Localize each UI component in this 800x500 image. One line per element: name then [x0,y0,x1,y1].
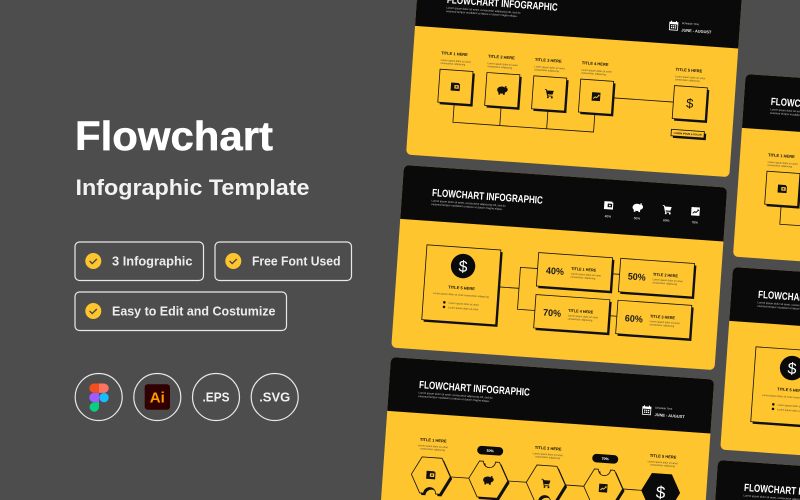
card 60%: Lorem ipsum dolor sit amet [650,320,680,325]
step 5: Lorem ipsum dolor sit amet [675,75,706,80]
main title: Flowchart [75,113,273,159]
main card: Lorem ipsum dolor sit amet [448,302,479,307]
slide 4 step 1: consectetur adipiscing [767,164,793,168]
slide 5 main card [751,347,800,429]
card 70%: Lorem ipsum dolor sit amet [568,314,598,319]
slide 1 description: Lorem ipsum dolor sit amet, consectetur adipiscing elit, sed do [446,6,521,15]
slide 2 header stats: 50% [634,216,640,221]
step 1 [438,50,476,107]
main card [422,245,503,327]
main card: TITLE 5 HERE [448,284,475,291]
hexagon step 3: consectetur adipiscing [535,455,561,460]
slide 2 header stats: 60% [663,218,670,223]
card 40%: TITLE 1 HERE [571,266,597,273]
step 4 [578,60,617,116]
slide 3 description: Lorem ipsum dolor sit amet, consectetur adipiscing elit, sed do [418,391,493,400]
card 60%: TITLE 3 HERE [650,314,675,320]
card 50%: Lorem ipsum dolor sit amet [653,278,683,283]
slide 2 description: Lorem ipsum dolor sit amet, consectetur adipiscing elit, sed do [431,199,506,208]
step 1: TITLE 1 HERE [441,50,468,57]
panel: slide 6 cropped hexagon flowchart [705,460,800,500]
hexagon step 1 [410,436,455,497]
icon: Adobe Illustrator: Ai [150,390,165,406]
card 70%: TITLE 4 HERE [568,308,594,315]
card 50%: consectetur adipiscing [652,281,678,286]
slide 2 heading: FLOWCHART INFOGRAPHIC [432,187,544,207]
slide 1 button: LOREM IPSUM & DOLOR [674,132,702,137]
slide 5 main card: $ [787,361,797,378]
slide 3 date: JUNE - AUGUST [654,412,685,419]
slide 2 description: eiusmod tempor incididunt ut labore et dolore magna aliqua. [431,202,503,211]
step 3: Lorem ipsum dolor sit amet [534,65,565,70]
hexagon step 3: TITLE 3 HERE [535,445,562,452]
icon: Figma [75,374,122,420]
hexagon step 3: Lorem ipsum dolor sit amet [533,452,563,457]
panel: slide 1 timeline flowchart [406,0,742,177]
icon: SVG [251,374,298,420]
icon: EPS: .EPS [202,390,230,405]
slide 1 date: Schedule Time [682,21,700,26]
panel: slide 2 percentage flowchart [391,165,727,370]
feature badge: Free Font Used [215,242,352,280]
step 5 [672,67,711,123]
slide 4 step 1: TITLE 1 HERE [768,152,795,159]
slide 5 description [757,300,800,313]
card 70%: consectetur adipiscing [568,317,593,322]
slide 1 description: eiusmod tempor incididunt ut labore et dolore magna aliqua. [446,9,518,18]
step 3: TITLE 3 HERE [535,57,562,64]
subtitle: Infographic Template [76,175,310,200]
card 60%: consectetur adipiscing [649,323,675,328]
step 5: $ [686,95,695,111]
slide 2 connectors [496,266,620,316]
step 4: TITLE 4 HERE [582,60,609,67]
card 60%: 60% [624,313,644,326]
card 40% [536,253,615,293]
slide 1 description [446,6,521,18]
step 3 [531,57,570,113]
main card: $ [458,259,468,276]
card 40%: Lorem ipsum dolor sit amet [571,272,601,278]
icon: SVG: .SVG [259,390,290,405]
slide 2 header stats [603,201,700,225]
card 70% [534,295,612,335]
step 2: consectetur adipiscing [487,65,513,70]
slide 3 connectors [450,477,642,490]
slide 2 header stats: 70% [691,220,698,225]
hexagon step 4: 70% [601,457,610,461]
slide 1 date [669,20,712,35]
slide 3 heading: FLOWCHART INFOGRAPHIC [419,379,531,399]
icon: Adobe Illustrator [134,374,181,420]
slide 4 step 1: Lorem ipsum dolor sit amet [767,161,798,166]
slide 3 description [418,391,493,403]
feature badge: 3 Infographic: 3 Infographic [112,254,192,269]
slide 2 header stats: 40% [605,214,611,219]
hexagon step 5: TITLE 5 HERE [650,453,677,460]
slide 3 date: Schedule Time [655,406,673,411]
card 50%: 50% [627,271,647,284]
card 50%: TITLE 2 HERE [653,272,678,278]
step 4: consectetur adipiscing [581,72,607,76]
hexagon step 5: consectetur adipiscing [650,463,676,468]
hexagon step 1: TITLE 1 HERE [420,437,447,444]
card 50% [618,258,697,299]
slide 4 step 1 [765,152,800,209]
step 4: Lorem ipsum dolor sit amet [581,69,612,74]
step 2 [485,54,523,110]
panel: slide 3 hexagon flowchart [378,357,714,500]
slide 3 description: eiusmod tempor incididunt ut labore et dolore magna aliqua. [418,394,490,403]
slide 3 date [642,405,686,419]
slide 1 button [671,129,706,140]
main card: Lorem ipsum dolor sit amet [448,306,479,311]
step 3: consectetur adipiscing [534,68,560,73]
hexagon step 2: 50% [486,449,495,453]
step 5: consectetur adipiscing [675,78,700,83]
hexagon step 4 [582,453,627,500]
hexagon step 3 [525,444,570,500]
slide 4 description [770,107,800,120]
step 1: consectetur adipiscing [440,62,466,66]
hexagon step 5 [640,452,683,500]
slide 1 connectors [453,87,673,137]
main card: Lorem ipsum dolor sit amet consectetur adipiscing [433,292,489,299]
step 5: TITLE 5 HERE [675,67,703,74]
panel: slide 4 cropped timeline [733,74,800,279]
feature badge: 3 Infographic [75,242,204,280]
slide 2 description [431,199,506,211]
icon: EPS [192,374,240,420]
card 60% [616,300,694,341]
card 40%: 40% [546,266,565,278]
panel: slide 5 cropped percentage flowchart [720,267,800,472]
feature badge: Easy to Edit and Costumize: Easy to Edit and Costumize [112,304,276,319]
hexagon step 1: consectetur adipiscing [420,447,446,452]
step 2: TITLE 2 HERE [488,54,515,60]
feature badge: Free Font Used: Free Font Used [252,254,341,269]
step 1: Lorem ipsum dolor sit amet [441,59,471,64]
step 2: Lorem ipsum dolor sit amet [487,62,518,67]
hexagon step 2 [467,445,512,500]
hexagon step 5: Lorem ipsum dolor sit amet [648,460,678,465]
hexagon step 1: Lorem ipsum dolor sit amet [418,444,448,449]
feature badge: Easy to Edit and Costumize [75,292,286,330]
card 40%: consectetur adipiscing [570,276,596,280]
slide 1 date: JUNE - AUGUST [681,27,712,35]
slide 4 connector [780,205,800,230]
card 70%: 70% [543,308,562,320]
